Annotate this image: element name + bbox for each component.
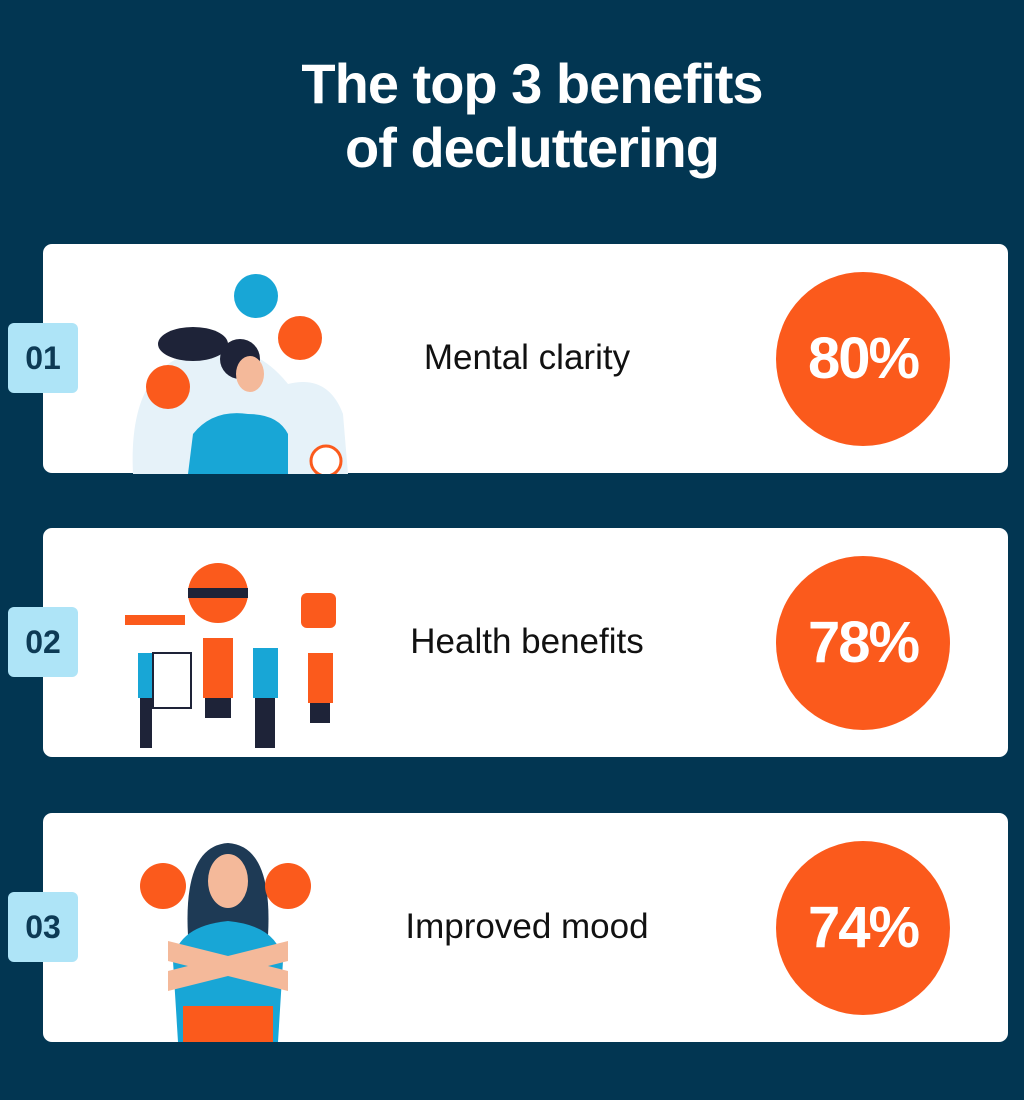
illustration: group with fitness items	[125, 563, 336, 748]
title: of decluttering	[345, 116, 719, 179]
badge 02	[8, 607, 78, 677]
badge 03	[8, 892, 78, 962]
title	[301, 52, 763, 179]
label: Mental clarity	[424, 338, 630, 377]
stat	[776, 272, 950, 446]
illustration: woman with clock	[132, 274, 348, 474]
label: Improved mood	[405, 907, 649, 946]
stat	[776, 556, 950, 730]
illustration: woman with smiley signs	[140, 843, 311, 1042]
badge 02: 02	[25, 624, 61, 660]
stat: 78%	[808, 610, 918, 675]
stat	[776, 841, 950, 1015]
panel: improved mood	[43, 813, 1008, 1042]
panel: mental clarity	[43, 244, 1008, 473]
badge 01	[8, 323, 78, 393]
panel: health benefits	[43, 528, 1008, 757]
badge 01: 01	[25, 340, 61, 376]
stat: 74%	[808, 895, 918, 960]
stat: 80%	[808, 326, 918, 391]
label: Health benefits	[410, 622, 644, 661]
badge 03: 03	[25, 909, 61, 945]
title: The top 3 benefits	[301, 52, 763, 115]
